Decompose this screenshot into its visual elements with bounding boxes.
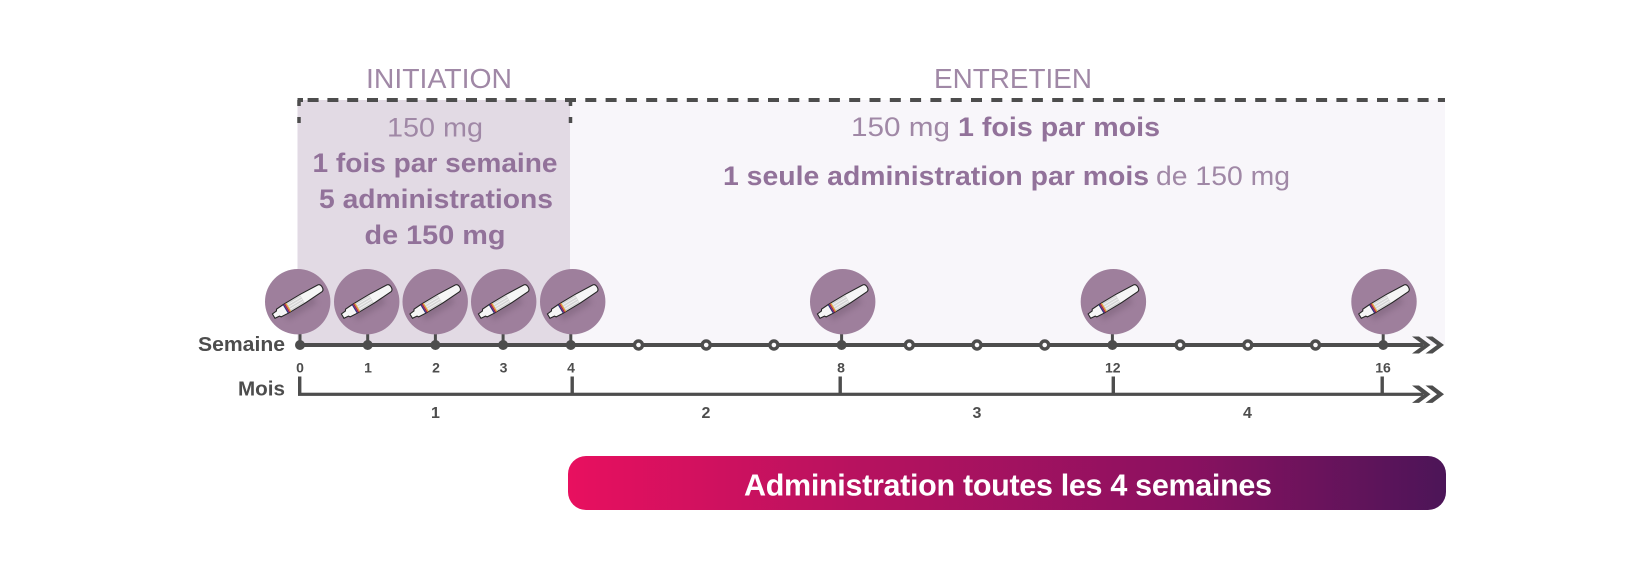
icon: injector pen week 2	[402, 269, 468, 334]
week numbers: 4	[567, 360, 575, 376]
text block: initiation dosage: 1 fois par semaine	[312, 148, 558, 178]
banner: administration toutes les 4 semaines: Administration toutes les 4 semaines	[744, 468, 1272, 502]
month numbers: 3	[973, 405, 982, 422]
label: semaine: Semaine	[198, 334, 285, 356]
text block: initiation dosage	[312, 112, 558, 250]
text block: initiation dosage: 150 mg	[387, 112, 483, 142]
month numbers	[431, 405, 1252, 422]
month numbers: 1	[431, 405, 440, 422]
icon: injector pen week 1	[334, 269, 399, 334]
text block: entretien dosage: de 150 mg	[1156, 161, 1290, 191]
text block: entretien dosage: 1 seule administration par mois	[723, 161, 1149, 191]
icon: injector pen week 4	[540, 269, 605, 334]
week numbers: 16	[1375, 360, 1391, 376]
panel: initiation background	[298, 100, 570, 345]
text block: initiation dosage: de 150 mg	[364, 220, 506, 250]
week numbers: 12	[1105, 360, 1121, 376]
week numbers: 1	[364, 360, 372, 376]
week numbers: 2	[432, 360, 440, 376]
heading: entretien: ENTRETIEN	[934, 63, 1092, 94]
icon: injector pen week 0	[265, 269, 330, 334]
month numbers: 4	[1243, 405, 1252, 422]
heading: initiation: INITIATION	[366, 63, 512, 94]
week numbers: 8	[837, 360, 845, 376]
month numbers: 2	[702, 405, 711, 422]
week axis	[295, 333, 1444, 354]
label: mois: Mois	[238, 378, 285, 400]
icon: injector pen week 8	[810, 269, 875, 334]
text block: entretien dosage: 150 mg	[851, 112, 950, 142]
panel: entretien background	[570, 100, 1445, 345]
week numbers	[296, 360, 1391, 376]
month axis	[298, 376, 1444, 403]
banner: administration toutes les 4 semaines	[568, 456, 1446, 510]
icon: injector pen week 3	[471, 269, 536, 334]
text block: entretien dosage: 1 fois par mois	[958, 112, 1160, 142]
icon: injector pen week 16	[1351, 269, 1417, 334]
dashed header line	[298, 100, 1445, 123]
week numbers: 3	[500, 360, 508, 376]
week numbers: 0	[296, 360, 304, 376]
text block: entretien dosage	[723, 112, 1290, 191]
text block: initiation dosage: 5 administrations	[319, 184, 553, 214]
icon: injector pen week 12	[1081, 269, 1146, 334]
